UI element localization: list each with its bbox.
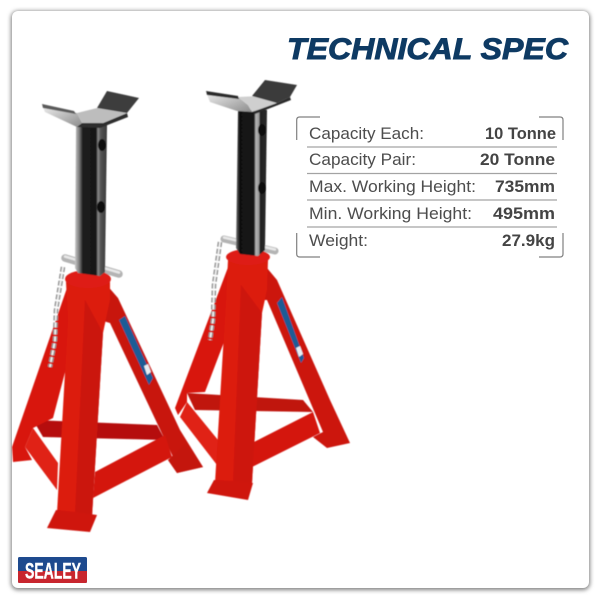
right stand collar — [226, 249, 270, 265]
left stand back crossbar — [33, 420, 165, 440]
logo: Sealey — [18, 557, 87, 584]
row: min working height: 495mm — [493, 205, 555, 223]
right stand chain — [210, 242, 220, 340]
left stand collar — [65, 270, 111, 288]
row: max working height: 735mm — [495, 178, 555, 196]
right stand left leg — [175, 262, 240, 415]
left stand front leg — [57, 280, 110, 517]
axle stand: right — [175, 80, 350, 500]
left stand left brace — [25, 428, 58, 490]
left stand pin — [65, 256, 119, 274]
left stand saddle — [42, 91, 139, 128]
row: capacity pair: Capacity Pair: — [309, 151, 416, 169]
row: capacity each: 10 Tonne — [485, 125, 556, 143]
left stand column — [75, 125, 107, 276]
row: weight — [309, 232, 555, 250]
right stand column holes — [258, 124, 266, 194]
row: weight: 27.9kg — [502, 232, 555, 250]
row: capacity pair: 20 Tonne — [480, 151, 555, 169]
row: capacity each — [309, 125, 556, 143]
left stand left leg — [12, 285, 84, 462]
right stand saddle — [206, 80, 297, 114]
row: max working height — [309, 178, 555, 196]
left stand column holes — [97, 139, 106, 213]
right stand front leg — [215, 258, 268, 483]
left stand right leg — [100, 283, 203, 473]
right stand back crossbar — [187, 393, 313, 412]
right stand right brace — [252, 412, 320, 467]
right stand front foot — [207, 480, 253, 500]
row: min working height — [309, 205, 555, 223]
row: min working height: Min. Working Height: — [309, 205, 472, 223]
right stand pin — [224, 238, 275, 251]
row dividers — [307, 147, 557, 227]
title: TECHNICAL SPEC — [287, 33, 569, 66]
axle stand: left — [12, 91, 203, 532]
row: max working height: Max. Working Height: — [309, 178, 476, 196]
right stand column — [236, 110, 267, 256]
row: capacity pair — [309, 151, 555, 169]
right stand left brace — [180, 402, 218, 465]
left stand right foot — [168, 444, 203, 473]
panel: specification table — [297, 117, 563, 257]
logo: Sealey: SEALEY — [25, 558, 81, 584]
row: capacity each: Capacity Each: — [309, 125, 424, 143]
table bracket corners — [297, 117, 563, 257]
right stand right leg — [258, 262, 350, 448]
right stand label — [277, 297, 304, 363]
left stand chain — [50, 267, 63, 367]
row: weight: Weight: — [309, 232, 368, 250]
left stand right brace — [93, 435, 172, 498]
left stand front foot — [47, 510, 97, 532]
left stand label — [119, 316, 153, 385]
